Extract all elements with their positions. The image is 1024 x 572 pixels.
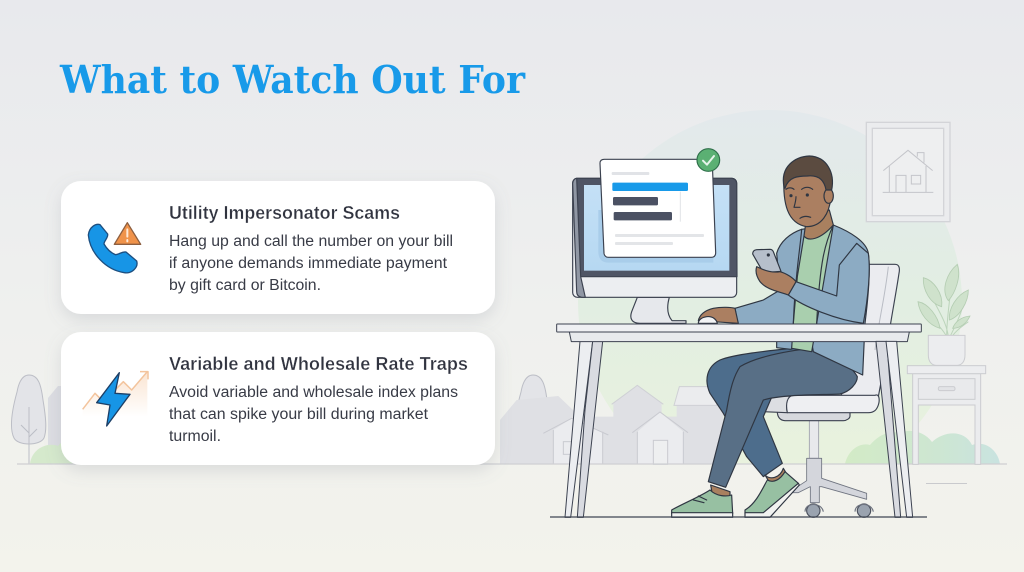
desk right leg: [876, 341, 913, 517]
icon: phone with warning: [88, 223, 141, 273]
horizon line: [17, 463, 1007, 465]
body text: Hang up and call the number on your bill: [169, 233, 453, 250]
seated person: [672, 156, 869, 517]
heading: Variable and Wholesale Rate Traps: [169, 354, 468, 374]
hand holding phone: [756, 267, 796, 295]
left background scenery: [11, 375, 550, 464]
monitor stand: [631, 297, 686, 323]
floor shadow line: [926, 482, 967, 484]
panel: utility impersonator scams: [61, 181, 495, 314]
potted plant: [918, 264, 970, 365]
mouse and hand: [698, 307, 738, 323]
body text: that can spike your bill during market: [169, 406, 429, 423]
forearm on phone side: [788, 243, 869, 323]
background circle: [578, 132, 962, 464]
face: [784, 167, 832, 227]
heading: Utility Impersonator Scams: [169, 203, 400, 223]
floor line: [550, 516, 927, 518]
facial features: [786, 187, 813, 218]
near leg: [708, 348, 857, 487]
far leg: [707, 346, 813, 477]
body text: [169, 384, 458, 445]
desktop monitor: [573, 178, 737, 323]
ground bush: [845, 431, 1000, 464]
monitor screen: [584, 185, 729, 271]
desk: [557, 324, 921, 342]
office chair: [763, 264, 899, 517]
chair back: [833, 264, 899, 412]
chair seat: [777, 412, 850, 421]
desk left leg: [565, 341, 603, 517]
body text: Avoid variable and wholesale index plans: [169, 384, 458, 401]
smartphone: [753, 249, 781, 273]
wall picture frame with house: [866, 122, 950, 222]
t-shirt: [792, 225, 833, 352]
chair base and casters: [788, 420, 873, 517]
hair: [783, 156, 832, 190]
icon: lightning bolt with rising price line: [83, 372, 148, 426]
body text: turmoil.: [169, 428, 221, 445]
side table: [907, 366, 986, 464]
popup bill document: [600, 149, 720, 257]
monitor body: [573, 178, 737, 297]
body text: [169, 233, 453, 294]
body text: by gift card or Bitcoin.: [169, 277, 321, 294]
body text: if anyone demands immediate payment: [169, 255, 448, 272]
panel: variable and wholesale rate traps: [61, 332, 495, 465]
title: What to Watch Out For: [59, 57, 526, 102]
ear: [824, 189, 833, 203]
right background houses: [500, 385, 723, 464]
far shoe: [745, 468, 799, 517]
cardigan: [735, 225, 869, 375]
green check badge: [697, 149, 720, 171]
near shoe: [672, 485, 733, 517]
neck: [804, 210, 833, 239]
